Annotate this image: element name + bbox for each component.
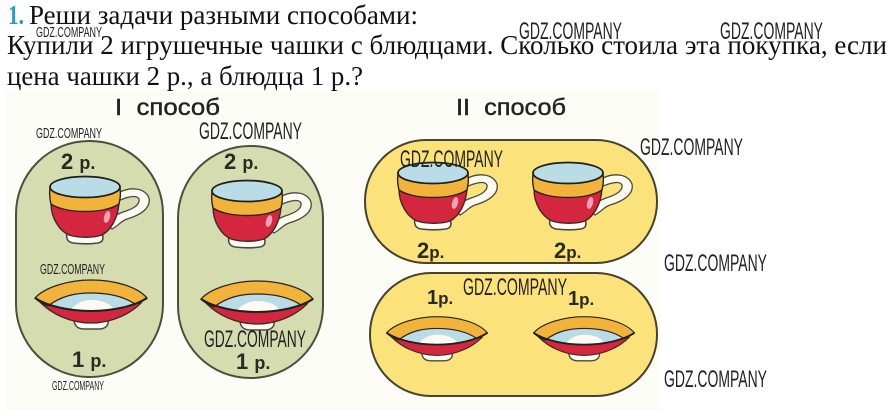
- capsule background: [16, 141, 163, 377]
- heading: method II: II способ: [456, 94, 566, 120]
- price label: left cup: 2р.: [417, 238, 444, 263]
- price label: cup: 2 р.: [224, 149, 258, 174]
- task instruction: Реши задачи разными способами:: [29, 0, 418, 30]
- icon: cup left: [398, 162, 497, 230]
- price label: saucer: 1 р.: [236, 349, 270, 374]
- watermarks: GDZ.COMPANY: [463, 274, 567, 301]
- icon: cup: [50, 176, 149, 244]
- price label: left saucer: 1р.: [427, 287, 453, 309]
- price label: saucer: 1 р.: [72, 347, 106, 372]
- icon: saucer: [201, 281, 313, 330]
- watermarks: GDZ.COMPANY: [720, 18, 823, 45]
- capsule background: [365, 140, 657, 263]
- icon: cup right: [533, 162, 632, 230]
- problem line 1: Купили 2 игрушечные чашки с блюдцами. Сколько стоила эта покупка, если: [7, 30, 887, 60]
- watermarks: GDZ.COMPANY: [400, 146, 503, 173]
- icon: saucer: [35, 280, 147, 329]
- panel: method I first set: [16, 141, 163, 377]
- watermarks: GDZ.COMPANY: [40, 261, 105, 278]
- capsule background: [178, 146, 323, 378]
- icon: cup: [212, 180, 311, 248]
- watermarks: GDZ.COMPANY: [36, 125, 102, 142]
- heading: method I: I способ: [115, 94, 220, 120]
- problem line 2: цена чашки 2 р., а блюдца 1 р.?: [7, 61, 363, 91]
- watermarks: GDZ.COMPANY: [36, 24, 102, 41]
- panel: method II cups: [365, 140, 657, 263]
- price label: right cup: 2р.: [554, 238, 581, 263]
- watermarks: GDZ.COMPANY: [199, 118, 302, 145]
- capsule background: [370, 273, 657, 396]
- icon: saucer right: [534, 317, 634, 361]
- panel: method II saucers: [370, 273, 657, 396]
- watermarks: [36, 18, 823, 393]
- picture background: [5, 90, 661, 410]
- watermarks: GDZ.COMPANY: [519, 18, 622, 45]
- watermarks: GDZ.COMPANY: [664, 250, 767, 277]
- price label: right saucer: 1р.: [568, 288, 594, 310]
- watermarks: GDZ.COMPANY: [664, 366, 767, 393]
- icon: saucer left: [387, 317, 487, 361]
- watermarks: GDZ.COMPANY: [640, 134, 743, 161]
- panel: method I second set: [178, 146, 323, 378]
- price label: cup: 2 р.: [61, 149, 95, 174]
- task text: [7, 0, 887, 91]
- watermarks: GDZ.COMPANY: [204, 326, 306, 353]
- watermarks: GDZ.COMPANY: [52, 378, 104, 393]
- task number: 1.: [8, 0, 24, 30]
